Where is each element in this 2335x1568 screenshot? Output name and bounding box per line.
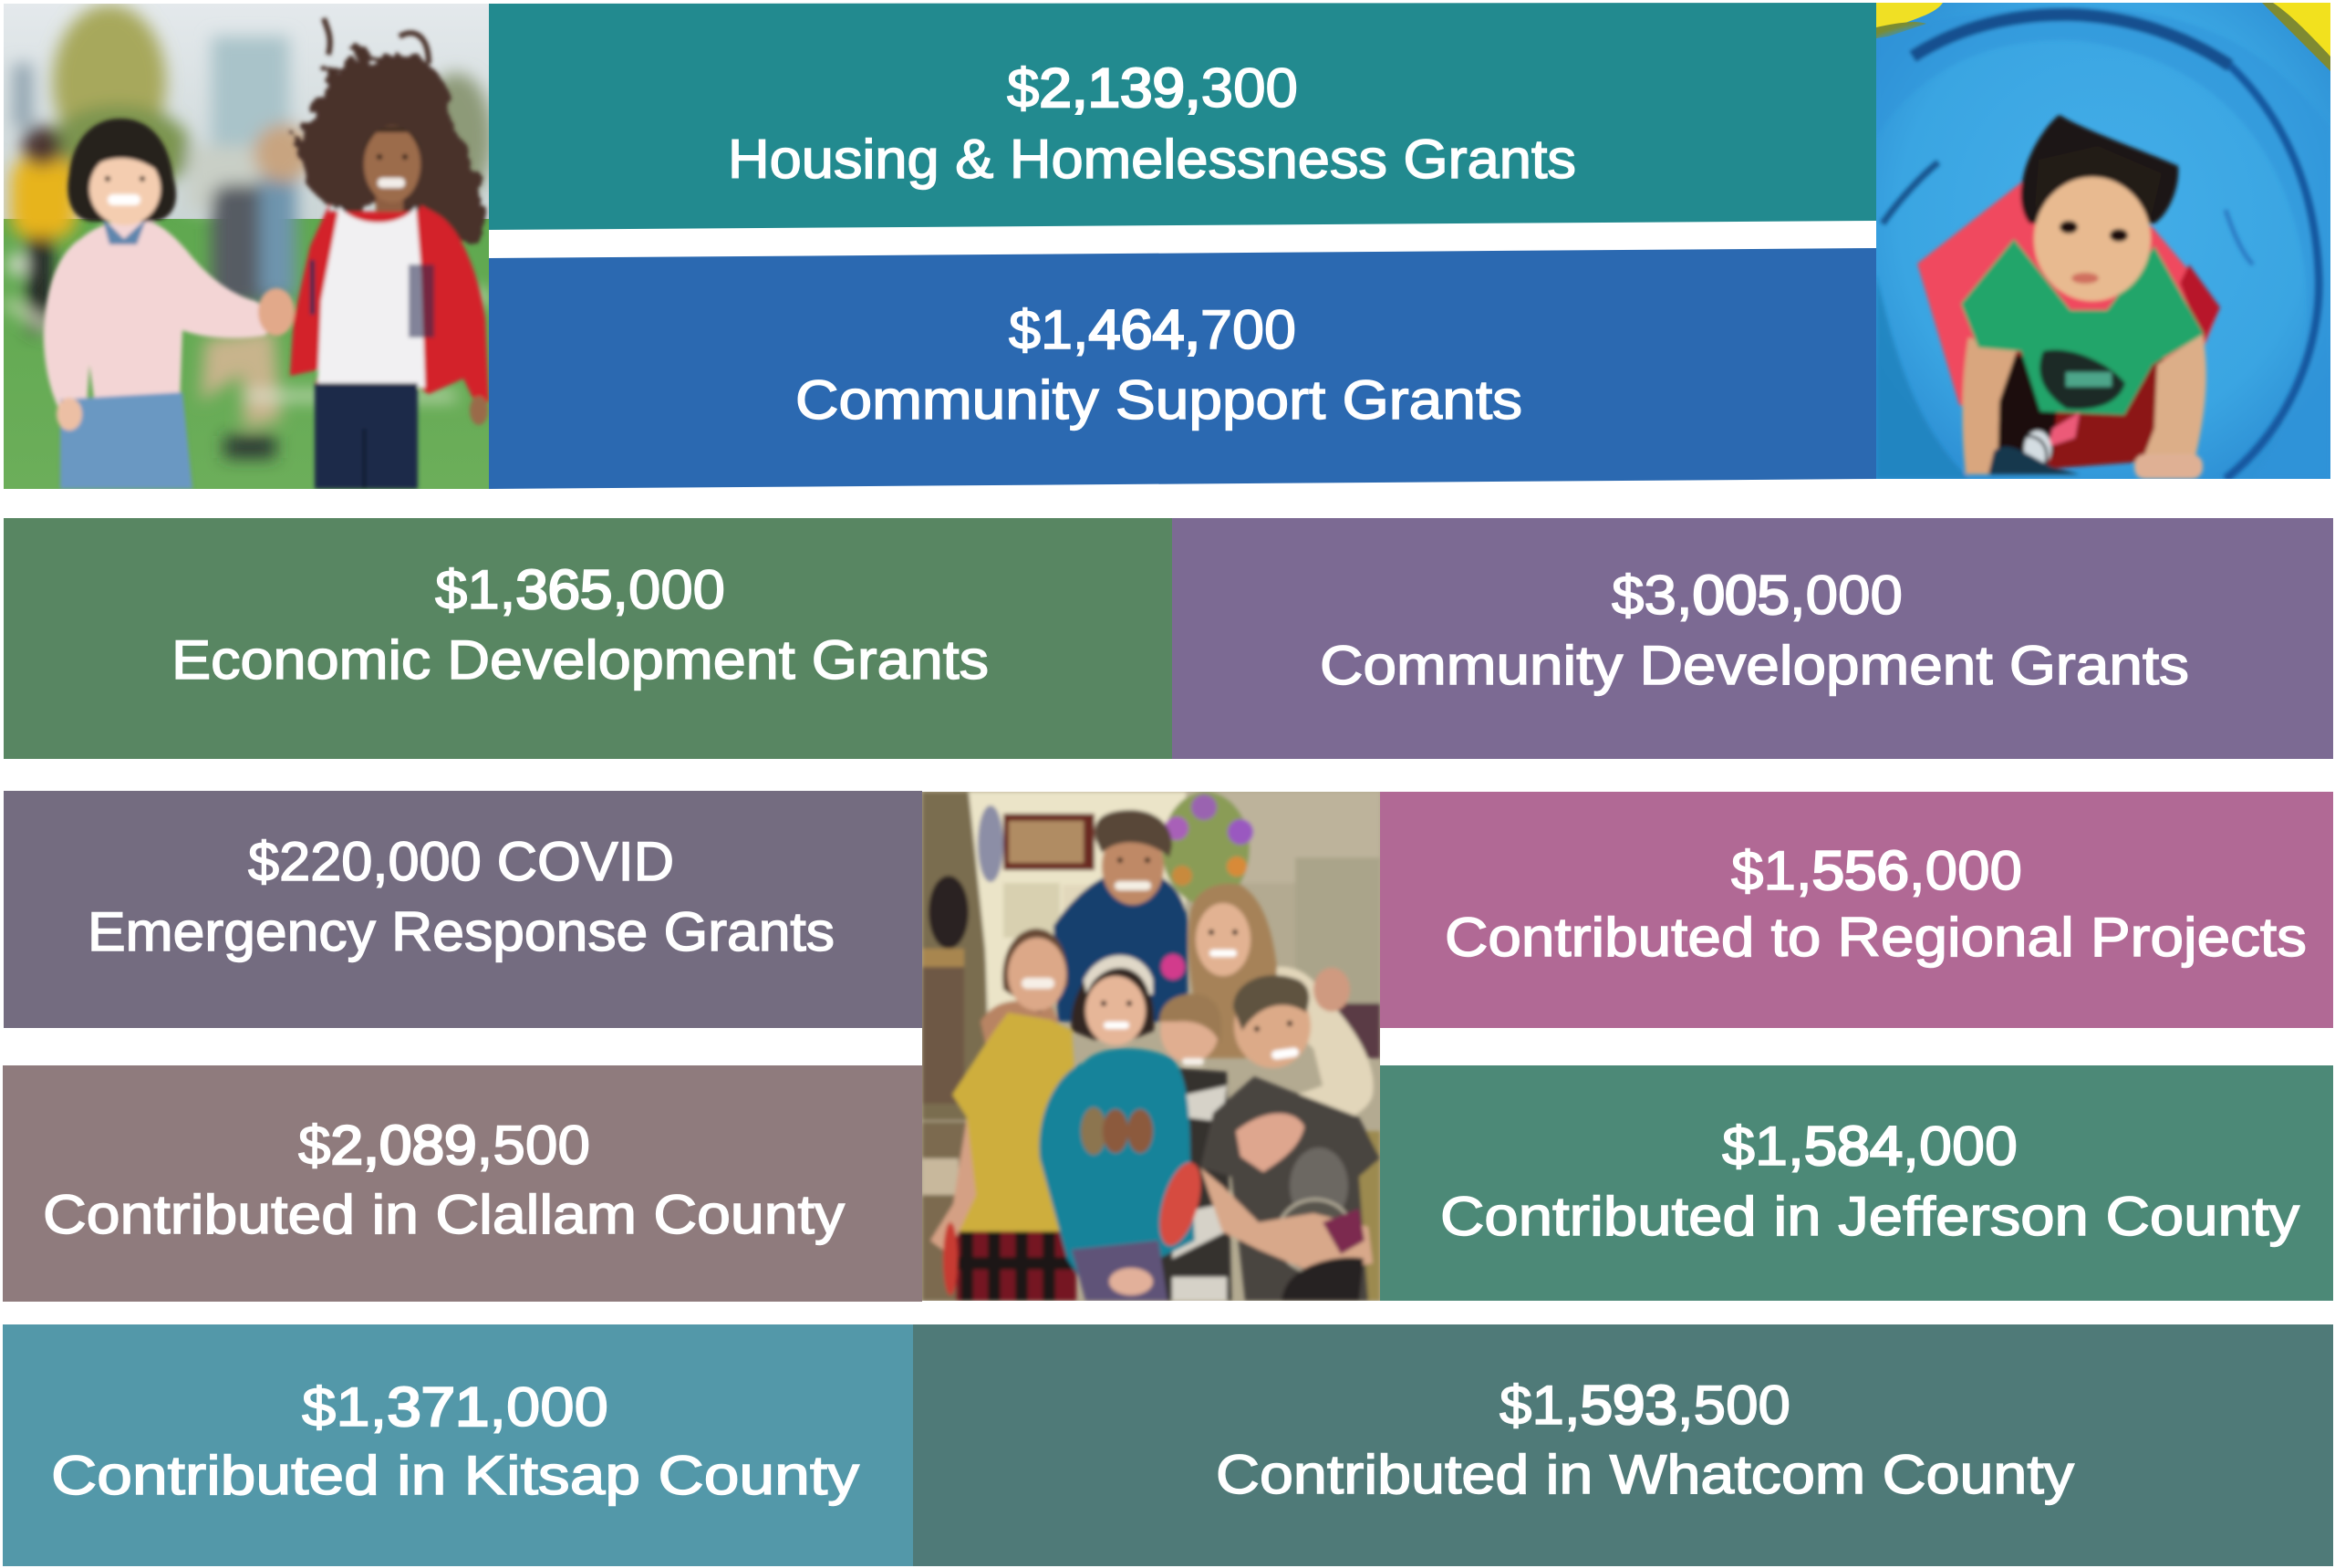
panel: covid emergency response grants [4,791,922,1028]
right child hair [301,53,483,241]
bar [489,248,1876,489]
paddle [1156,1158,1204,1250]
panel: economic development grants [4,518,1172,759]
amount: $1,365,000 [435,559,725,620]
amount: $1,371,000 [302,1376,608,1438]
bar [4,518,1172,759]
bar [913,1324,2333,1566]
label: Contributed to Regional Projects [1445,907,2307,968]
panel: housing and homelessness grants [489,3,1876,230]
clasped hands [258,288,295,336]
bookshelf [969,792,1186,1040]
bar [1172,518,2333,759]
label: Emergency Response Grants [88,901,835,962]
label: Housing & Homelessness Grants [728,129,1576,190]
mother [1188,884,1277,1058]
tunnel back opening [1915,179,2219,409]
label: Economic Development Grants [171,629,989,691]
panel: contributed in whatcom county [913,1324,2333,1566]
mother's hand on boy [1236,1114,1304,1172]
jacket [290,202,489,410]
left girl [952,1012,1085,1241]
amount: $3,005,000 [1612,565,1903,626]
boy [1200,1076,1380,1301]
panel: contributed in clallam county [3,1065,922,1302]
shirt [1961,239,2204,415]
label: Contributed in Clallam County [43,1184,845,1245]
father's arm and hand [979,998,1062,1043]
panel: community development grants [1172,518,2333,759]
arms [1963,337,2018,474]
photo: toddler crawling through a blue play tunnel [1876,3,2330,479]
amount: $220,000 COVID [248,831,674,892]
amount: $1,556,000 [1731,840,2022,901]
label: Community Support Grants [795,369,1522,431]
pants [1998,351,2164,470]
bar [4,791,922,1028]
label: Contributed in Whatcom County [1216,1444,2074,1505]
panel: contributed in kitsap county [3,1324,913,1566]
lower clutter [922,1122,968,1301]
label: Contributed in Jefferson County [1440,1186,2299,1247]
bar [3,1324,913,1566]
middle girl [1039,1048,1195,1295]
label: Community Development Grants [1320,635,2189,696]
photo: two children running on a sports field [3,4,493,489]
father [1053,876,1188,1022]
panel: community support grants [489,248,1876,489]
bar [1380,792,2333,1028]
amount: $1,593,500 [1500,1375,1790,1436]
panel: contributed to regional projects [1380,792,2333,1028]
bar [489,3,1876,230]
amount: $2,089,500 [298,1115,590,1176]
plant [1162,792,1250,905]
amount: $1,584,000 [1722,1116,2018,1177]
left child [44,219,281,421]
small child [1160,1067,1231,1301]
bar [3,1065,922,1302]
bar [1380,1065,2333,1301]
panel: contributed in jefferson county [1380,1065,2333,1301]
amount: $2,139,300 [1007,57,1298,119]
photo: family of six smiling together at home [922,792,1380,1301]
amount: $1,464,700 [1009,299,1296,360]
ball [2024,431,2051,467]
label: Contributed in Kitsap County [51,1445,859,1506]
head [2021,115,2178,223]
